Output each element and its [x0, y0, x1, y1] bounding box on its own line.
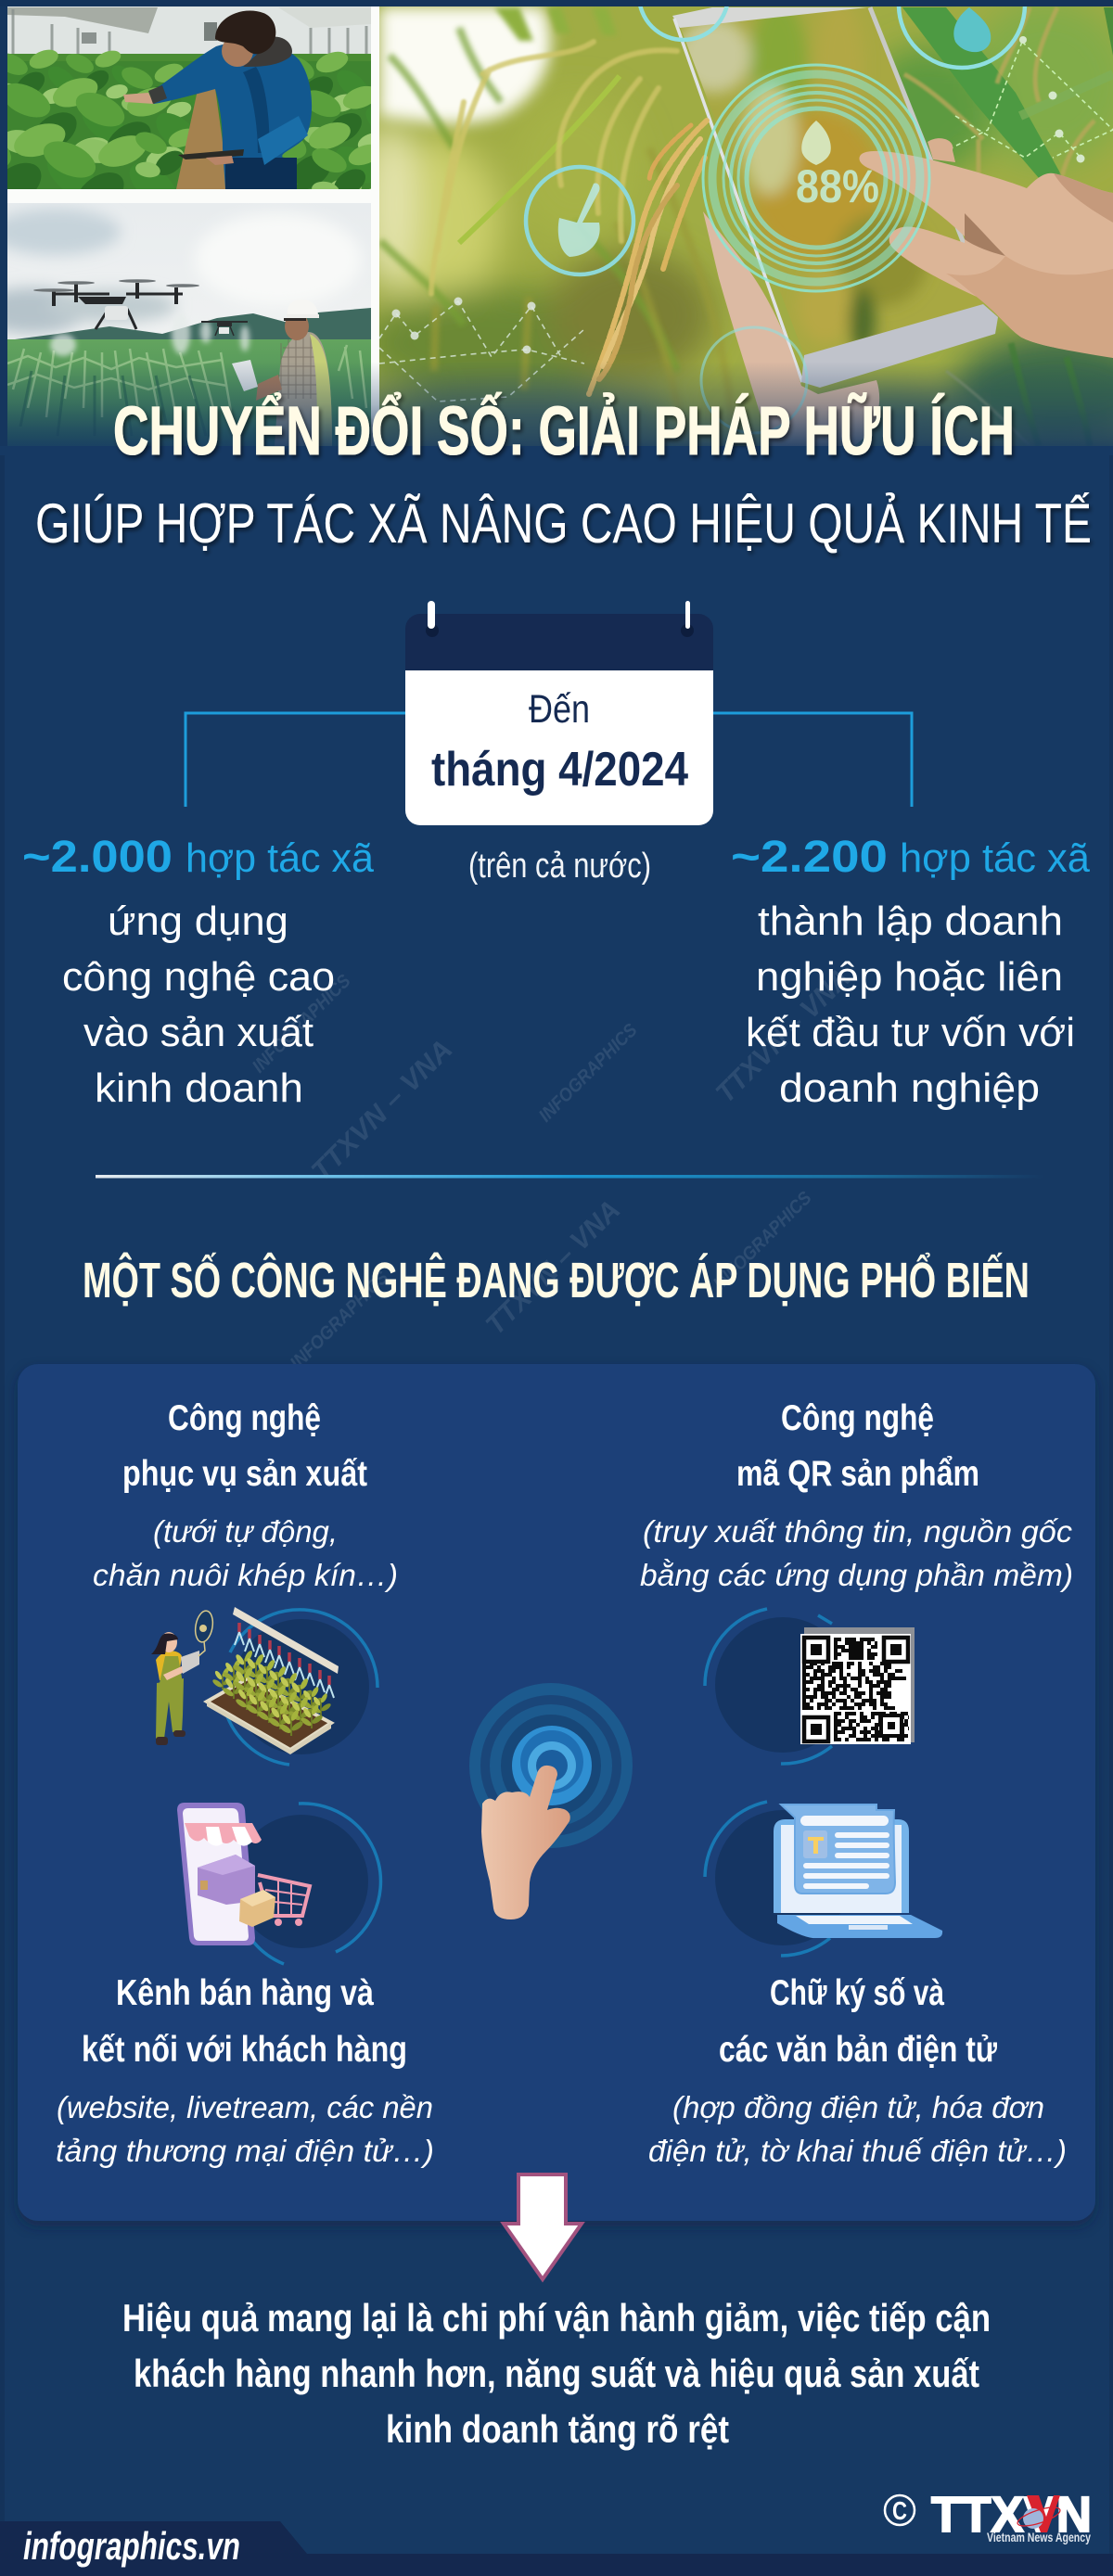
percentage reading: 88% [796, 160, 879, 212]
farmer figure [151, 1610, 215, 1745]
icon: QR code [705, 1609, 915, 1764]
header photo: rice field with tablet and digital circles [362, 0, 1113, 446]
right statistic: 2.200 cooperatives [731, 833, 1091, 882]
pointing hand [859, 138, 1113, 358]
TTXVN logo: TTXVN [931, 2487, 1092, 2543]
nationwide note: (trên cả nước) [468, 847, 651, 886]
right statistic description: doanh nghiệp [779, 1065, 1040, 1111]
fade from photos into navy background [0, 362, 1113, 446]
technology 3 description [56, 2090, 434, 2168]
arrow down [504, 2174, 582, 2279]
panel: technologies [18, 1364, 1095, 2221]
digital ring gauges [703, 65, 929, 291]
icon: touching hand on target [469, 1683, 633, 1919]
header photo: agricultural drones over field [0, 203, 371, 446]
copyright symbol [885, 2495, 915, 2525]
technology 4 description: điện tử, tờ khai thuế điện tử…) [648, 2134, 1067, 2168]
technology 4 description [648, 2090, 1067, 2168]
header photo: farmer with tablet in greenhouse [7, 6, 371, 189]
technology 2 description: bằng các ứng dụng phần mềm) [640, 1558, 1073, 1592]
holding hand [703, 211, 879, 446]
left statistic: 2.000 cooperatives: ~2.000 [22, 833, 173, 882]
right statistic: 2.200 cooperatives: hợp tác xã [900, 835, 1091, 881]
technology 1 heading: phục vụ sản xuất [122, 1454, 367, 1494]
calendar text: Đến: Đến [529, 687, 590, 732]
copyright symbol: C [892, 2496, 907, 2525]
background stems right of tablet [902, 7, 1062, 178]
right statistic description [746, 899, 1075, 1111]
connector lines from calendar [186, 713, 912, 807]
technology 3 heading: kết nối với khách hàng [82, 2030, 407, 2070]
technology 3 description: (website, livetream, các nền [57, 2090, 433, 2124]
technology 4 description: (hợp đồng điện tử, hóa đơn [672, 2090, 1044, 2124]
right statistic description: thành lập doanh [758, 899, 1063, 944]
icon: online store [177, 1803, 380, 1964]
technology 2 heading [736, 1398, 979, 1494]
technology 4 heading [719, 1973, 998, 2070]
technology 3 heading: Kênh bán hàng và [116, 1973, 374, 2013]
technology 1 description: chăn nuôi khép kín…) [93, 1558, 398, 1592]
technology 1 heading: Công nghệ [168, 1398, 321, 1438]
technology 1 heading [122, 1398, 367, 1494]
watermarks: INFOGRAPHICS [535, 1020, 642, 1127]
technology 4 heading: các văn bản điện tử [719, 2030, 998, 2070]
footer band [0, 2521, 1113, 2576]
technology 1 description: (tưới tự động, [153, 1514, 338, 1549]
left statistic description: ứng dụng [108, 899, 288, 944]
technology 4 heading: Chữ ký số và [770, 1973, 944, 2013]
conclusion text: kinh doanh tăng rõ rệt [386, 2407, 729, 2451]
left statistic description: vào sản xuất [83, 1010, 313, 1055]
golden rice panicle [589, 121, 707, 394]
website label: infographics.vn [23, 2524, 240, 2568]
technology 3 description: tảng thương mại điện tử…) [56, 2134, 434, 2168]
technology 2 heading: Công nghệ [781, 1398, 934, 1438]
watermarks: TTXVN – VNA [306, 1034, 458, 1187]
technology 2 description: (truy xuất thông tin, nguồn gốc [643, 1514, 1073, 1549]
technology 1 description [93, 1514, 398, 1592]
conclusion text [122, 2296, 991, 2451]
left statistic: 2.000 cooperatives [22, 833, 375, 882]
technology 2 description [640, 1514, 1073, 1592]
tablet frame [672, 7, 998, 388]
tablet screen [681, 8, 939, 354]
left statistic description: công nghệ cao [62, 954, 335, 1000]
icon: laptop with document [705, 1802, 942, 1956]
watermarks: TTXVN – VNA [710, 963, 856, 1109]
left statistic description [62, 899, 335, 1111]
watermarks: TTXVN – VNA [480, 1194, 626, 1341]
calendar card [405, 601, 713, 825]
left statistic: 2.000 cooperatives: hợp tác xã [186, 835, 375, 881]
technology 3 heading [82, 1973, 407, 2070]
calendar text: month: tháng 4/2024 [431, 743, 688, 797]
watermarks: INFOGRAPHICS [287, 1268, 393, 1374]
watermarks: INFOGRAPHICS [710, 1188, 816, 1294]
right statistic: 2.200 cooperatives: ~2.200 [731, 833, 888, 882]
technology 2 heading: mã QR sản phẩm [736, 1454, 979, 1494]
right statistic description: kết đầu tư vốn với [746, 1010, 1075, 1055]
icon: irrigation farm [151, 1607, 377, 1765]
watermarks [249, 963, 856, 1374]
left statistic description: kinh doanh [95, 1065, 303, 1111]
right statistic description: nghiệp hoặc liên [756, 954, 1063, 1000]
watermarks: INFOGRAPHICS [249, 971, 355, 1078]
